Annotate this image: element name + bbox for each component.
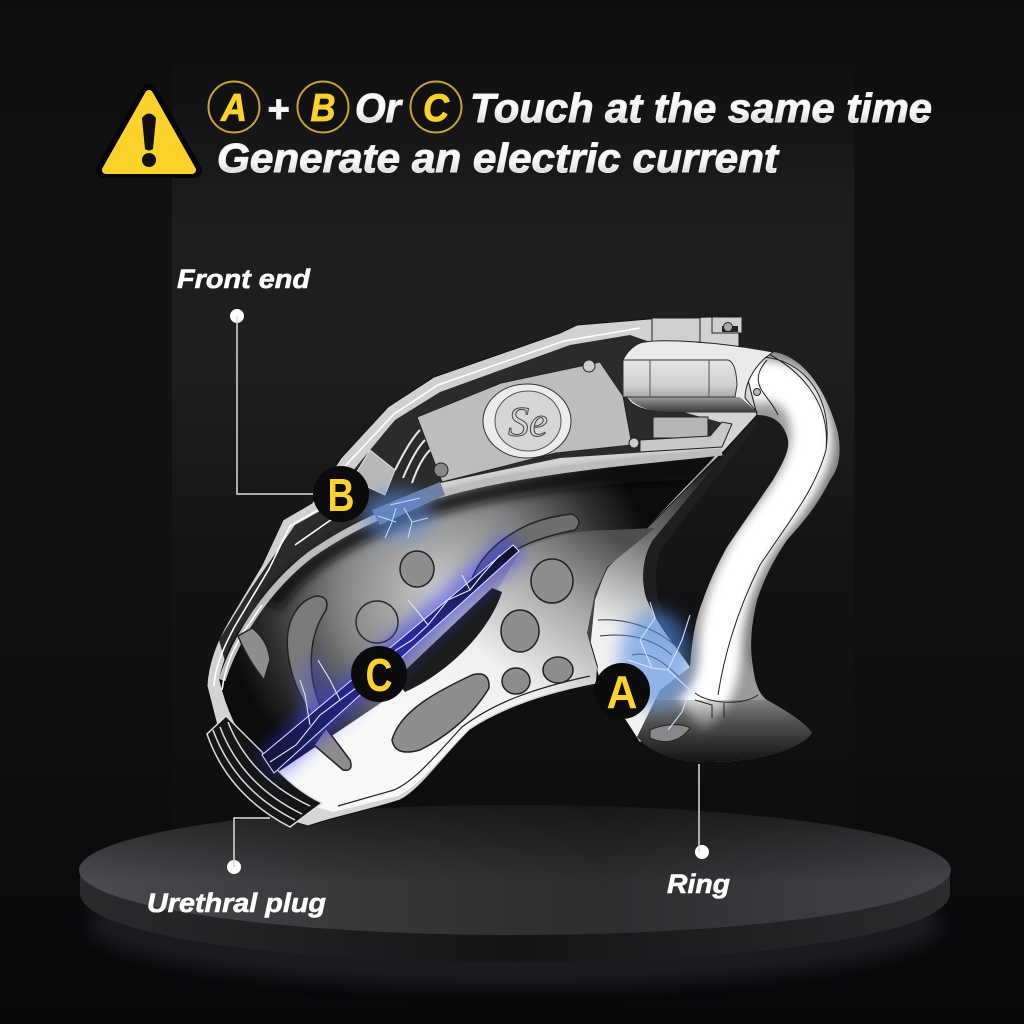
blue glow bbox=[270, 489, 691, 765]
title line 2: Generate an electric current bbox=[217, 135, 780, 181]
lower body surface bbox=[278, 528, 655, 812]
ring tube bbox=[625, 352, 840, 770]
marker A bbox=[594, 663, 650, 719]
badge A bbox=[208, 82, 260, 132]
shell edge highlights bbox=[214, 328, 640, 690]
metal rod bbox=[262, 545, 519, 773]
marker B: B bbox=[328, 469, 354, 521]
callout: urethral plug bbox=[147, 818, 327, 918]
inner cavity bbox=[219, 456, 715, 790]
badge B: B bbox=[310, 87, 336, 130]
callout: urethral plug: Urethral plug bbox=[147, 888, 327, 918]
callout: front end bbox=[177, 264, 318, 494]
title line 1: Touch at the same time bbox=[470, 85, 932, 131]
callout: ring: Ring bbox=[667, 869, 731, 899]
badge C: C bbox=[423, 87, 450, 130]
badge C bbox=[410, 82, 462, 132]
ring arm bbox=[587, 415, 757, 742]
motor housing bbox=[622, 341, 773, 412]
urethral plug end bbox=[207, 716, 322, 827]
body shell bbox=[207, 316, 757, 826]
dark sliver under rod bbox=[395, 588, 502, 692]
word Or: Or bbox=[355, 85, 403, 131]
plus sign: + bbox=[267, 89, 289, 131]
perforation holes bbox=[238, 514, 579, 770]
logo medallion bbox=[483, 384, 571, 458]
housing interior bbox=[219, 335, 730, 665]
device illustration bbox=[207, 316, 840, 827]
title bbox=[208, 82, 932, 181]
logo medallion: Se bbox=[508, 400, 548, 446]
marker C bbox=[351, 646, 407, 702]
platform bbox=[79, 805, 951, 987]
lower edge trim bbox=[338, 676, 590, 806]
marker C: C bbox=[366, 649, 392, 701]
lightning arcs bbox=[270, 498, 690, 762]
badge A: A bbox=[220, 87, 247, 130]
lower shell band bbox=[222, 452, 722, 680]
badge B bbox=[298, 82, 348, 132]
warning triangle icon bbox=[104, 92, 194, 170]
callout: front end: Front end bbox=[177, 264, 311, 294]
callout: ring bbox=[667, 764, 731, 899]
dark upper cavity shadow bbox=[262, 456, 715, 610]
marker B bbox=[313, 466, 369, 522]
marker A: A bbox=[606, 666, 638, 718]
electronics housing bbox=[352, 317, 742, 525]
